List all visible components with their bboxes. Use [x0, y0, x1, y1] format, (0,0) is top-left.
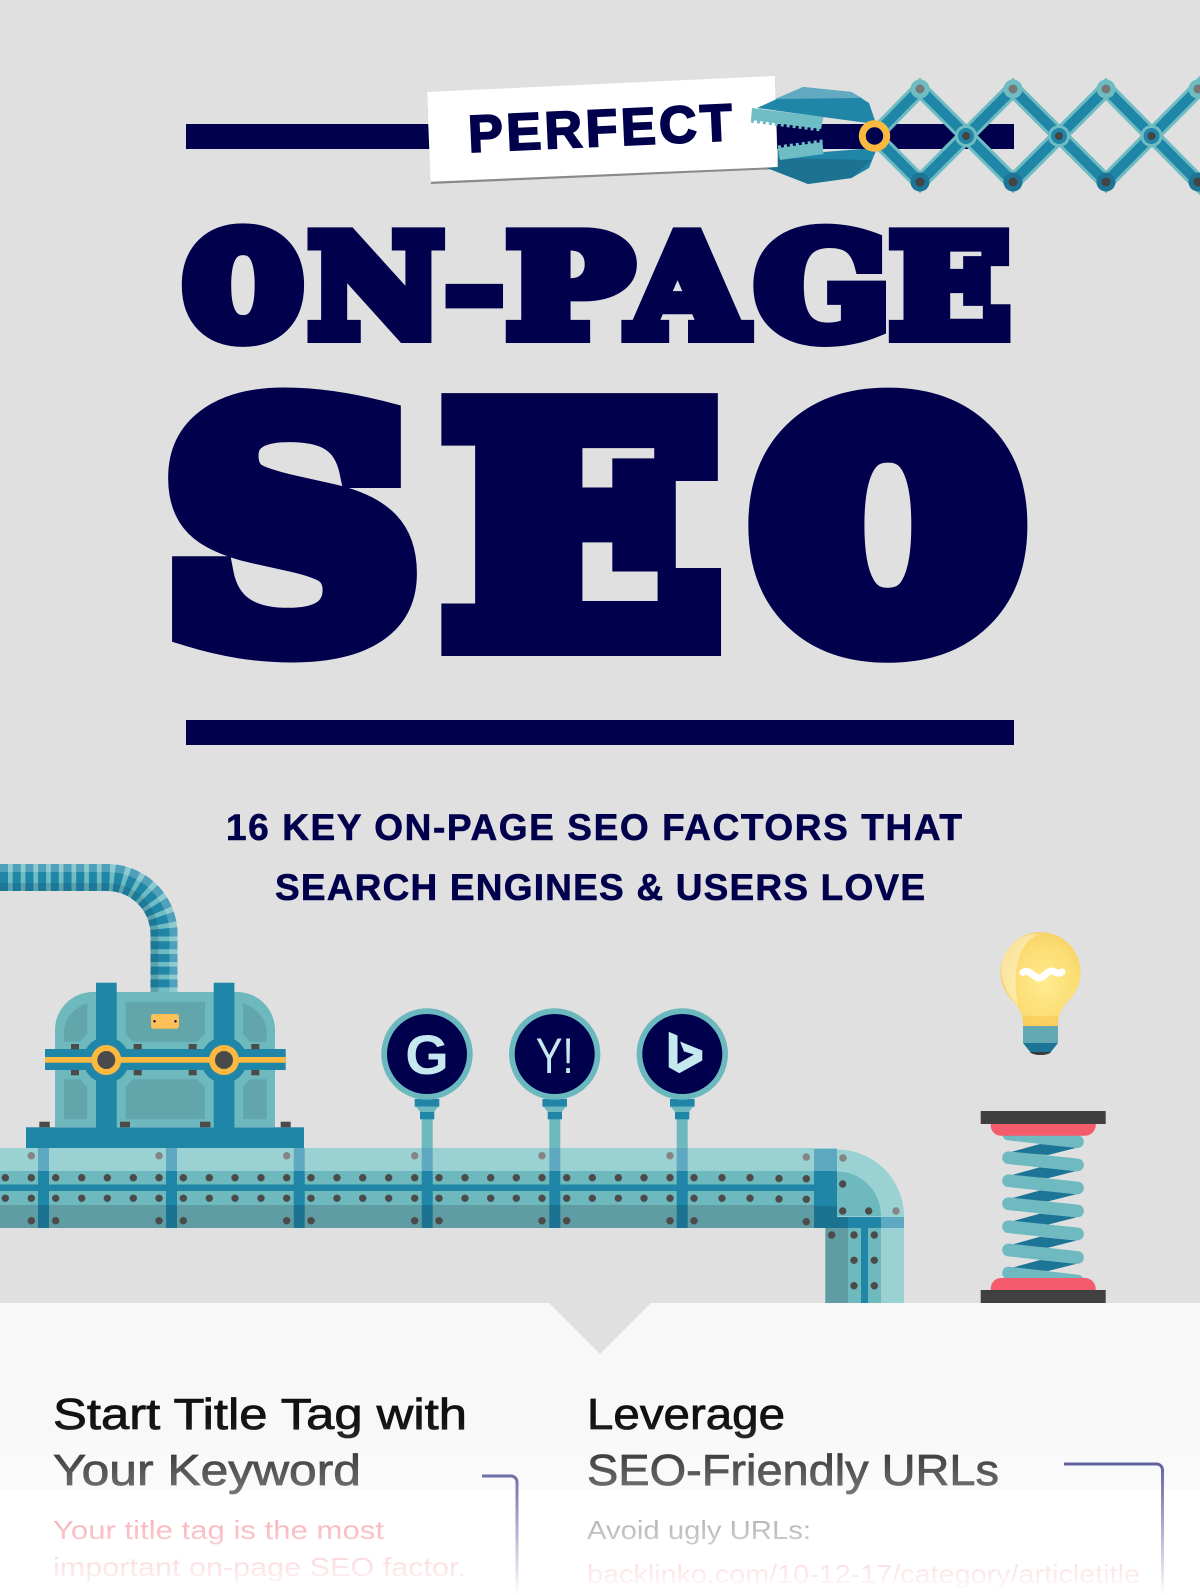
factor 1 text: Your Keyword: [53, 1446, 361, 1495]
subtitle: [226, 807, 962, 908]
google g: G: [405, 1023, 449, 1086]
factor 2 text: Avoid ugly URLs:: [587, 1515, 811, 1545]
title: seo: E: [444, 345, 720, 714]
icon: bing b: [669, 1032, 702, 1073]
title: seo: O: [765, 361, 1011, 698]
title: on-page: O: [188, 210, 298, 365]
factor 2 text: [587, 1390, 1140, 1589]
pipe elbow: [814, 1149, 904, 1303]
title: on-page: -: [444, 223, 504, 352]
factor 1 text: Start Title Tag with: [53, 1390, 467, 1439]
search post: bing: [637, 1008, 728, 1148]
search post: google: [381, 1008, 473, 1148]
factor 2 text: Leverage: [587, 1390, 785, 1439]
factor 1 text: important on-page SEO factor.: [53, 1552, 466, 1582]
tag: perfect: [427, 76, 778, 184]
yahoo y!: Y!: [536, 1028, 574, 1084]
title: on-page: P: [507, 206, 632, 368]
subtitle: 16 KEY ON-PAGE SEO FACTORS THAT: [226, 807, 962, 848]
machine gauges: [91, 1045, 239, 1075]
bracket right: [1064, 1464, 1163, 1595]
bracket left: [482, 1476, 517, 1595]
scissor lattice arm: [874, 77, 1200, 194]
spring coils: [1008, 1134, 1078, 1281]
coil spring: [981, 1111, 1106, 1303]
machine bolts: [39, 1044, 291, 1127]
subtitle: SEARCH ENGINES & USERS LOVE: [275, 867, 925, 908]
spring pads: [991, 1124, 1096, 1136]
factor 1 text: Your title tag is the most: [53, 1515, 385, 1545]
factor 2 text: SEO-Friendly URLs: [587, 1446, 999, 1495]
header rule top: [186, 124, 1014, 149]
machine panels: [64, 1002, 267, 1119]
machine nameplate: [151, 1014, 179, 1029]
title: on-page: N: [309, 206, 443, 368]
pipe straps: [38, 1148, 688, 1228]
corrugated tube: [0, 868, 174, 992]
pipe rivets: [5, 1156, 896, 1286]
header rule bottom: [186, 720, 1014, 745]
icon: light bulb: [1001, 932, 1081, 1055]
title: seo: S: [165, 343, 418, 715]
factor 1 text: [53, 1390, 467, 1582]
search post: yahoo: [509, 1008, 600, 1148]
title: on-page: G: [756, 205, 890, 371]
title: on-page: A: [628, 206, 747, 368]
claw gripper: [751, 87, 887, 184]
perfect text: PERFECT: [467, 94, 734, 164]
content panel: [0, 1303, 1200, 1595]
title: on-page: E: [890, 206, 1010, 368]
main pipe: [0, 1148, 904, 1303]
spring shadows: [1010, 1144, 1077, 1271]
factor 2 text: backlinko.com/10-12-17/category/articletitle: [587, 1559, 1140, 1589]
compressor machine: [26, 983, 304, 1148]
